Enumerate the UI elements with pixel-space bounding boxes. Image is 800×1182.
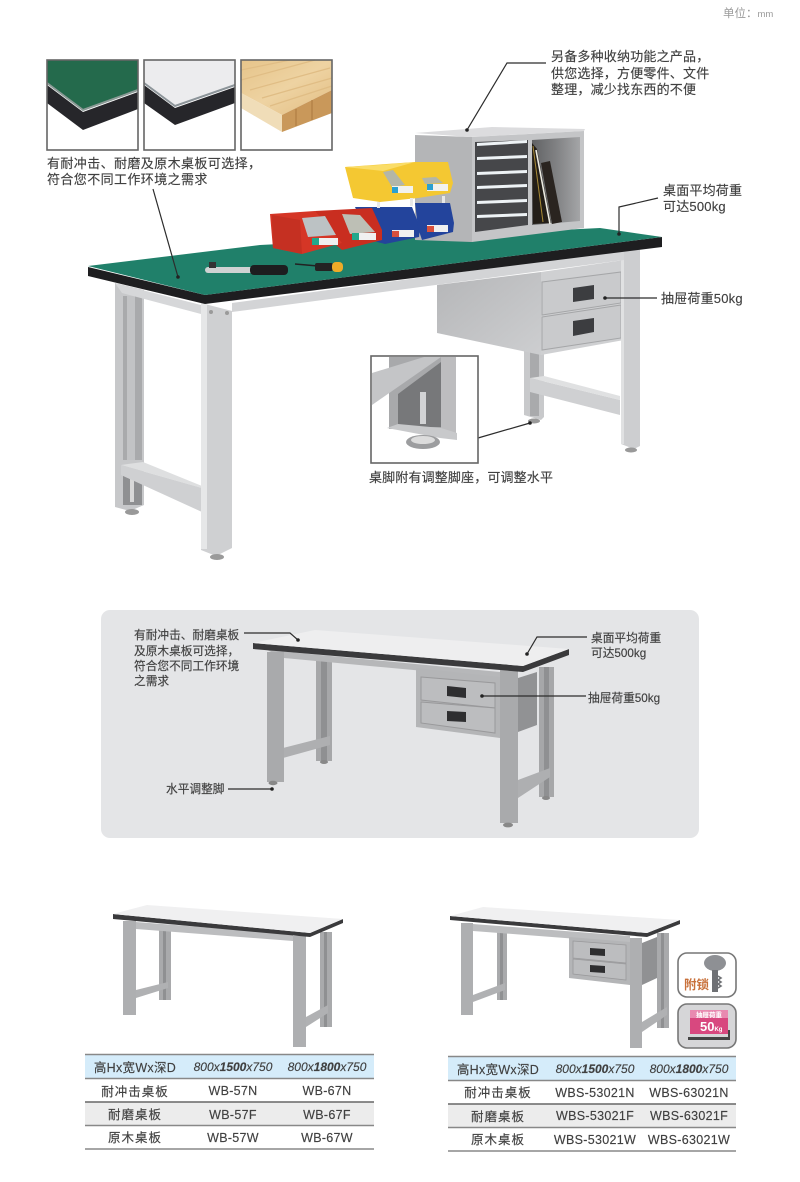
- row: wood: [108, 1131, 353, 1145]
- green tabletop: [88, 228, 662, 304]
- note: top choices: 及原木桌板可选择，: [134, 644, 239, 658]
- front rail: [232, 250, 624, 312]
- left leg with crossbar: [115, 283, 202, 515]
- row: wood: WB-67W: [301, 1131, 353, 1145]
- row: impact: WBS-53021N: [555, 1086, 635, 1100]
- row: wear: 耐磨桌板: [471, 1110, 525, 1124]
- callout: top load: 桌面平均荷重: [663, 183, 742, 198]
- row: impact: WB-57N: [208, 1084, 258, 1098]
- product: bench with drawer: [450, 907, 680, 1048]
- row: wear: WBS-53021F: [556, 1109, 634, 1123]
- panel: bench diagram: [101, 610, 699, 838]
- callout: storage products: 整理，减少找东西的不便: [551, 82, 696, 97]
- yellow bins: [345, 162, 453, 202]
- leader: foot: [478, 421, 532, 438]
- icon: key lock: [678, 953, 736, 997]
- leader: tabletop: [153, 189, 180, 279]
- table: WB models: [85, 1054, 374, 1149]
- header row: [94, 1060, 367, 1075]
- tabletop material swatches: [47, 60, 332, 150]
- bin rack posts: [377, 196, 445, 208]
- header row: 800x1500x750: [194, 1060, 273, 1074]
- unit label: 单位：mm: [723, 6, 773, 20]
- callout: storage products: 供您选择，方便零件、文件: [551, 66, 709, 81]
- row: wood: WB-57W: [207, 1131, 259, 1145]
- header row: [457, 1062, 729, 1077]
- icon: drawer load 50kg: 50Kg: [700, 1019, 723, 1034]
- caption: tabletop choices: 符合您不同工作环境之需求: [47, 172, 208, 187]
- left front leg: [201, 303, 232, 560]
- row: impact: WB-67N: [302, 1084, 352, 1098]
- icon: drawer load 50kg: 抽屉荷重: [696, 1010, 722, 1019]
- row: impact: 耐冲击桌板: [101, 1084, 169, 1099]
- swatch: white wear-resistant top: [144, 60, 235, 150]
- note: top choices: 有耐冲击、耐磨桌板: [134, 629, 239, 642]
- inset: adjustable foot: [371, 356, 478, 463]
- main workbench photo: [88, 127, 662, 560]
- rear legs: [316, 658, 554, 800]
- file cabinet with books: [415, 127, 585, 242]
- side rail: [115, 283, 232, 314]
- back right leg and crossbar: [524, 350, 620, 424]
- row: wear: [471, 1109, 728, 1124]
- header row: 高Hx宽Wx深D: [457, 1062, 539, 1077]
- drawer handles: [477, 140, 527, 218]
- drawer unit: [437, 260, 624, 355]
- blue bins: [355, 203, 454, 244]
- row: wear: WBS-63021F: [650, 1109, 728, 1123]
- row: wear: WB-67F: [303, 1108, 351, 1122]
- header row: 800x1500x750: [556, 1062, 635, 1076]
- front legs: [267, 652, 518, 827]
- row: wood: 原木桌板: [471, 1133, 525, 1147]
- icon: drawer load 50kg: [678, 1004, 736, 1048]
- header row: 高Hx宽Wx深D: [94, 1060, 176, 1075]
- caption: tabletop choices: 有耐冲击、耐磨及原木桌板可选择，: [47, 156, 261, 171]
- leader: drawer: [480, 694, 586, 698]
- row: wear: WB-57F: [209, 1108, 257, 1122]
- note: foot: 水平调整脚: [166, 782, 224, 796]
- leader: top choices: [244, 633, 300, 642]
- product: bench without drawer: [113, 905, 343, 1047]
- row: impact: 耐冲击桌板: [464, 1085, 532, 1100]
- row: impact: WBS-63021N: [649, 1086, 729, 1100]
- header row: 800x1800x750: [288, 1060, 367, 1074]
- diagram rail: [267, 650, 500, 678]
- note: drawer: 抽屉荷重50kg: [588, 691, 660, 705]
- tool: ratchet wrench: [205, 262, 288, 275]
- row: wood: WBS-53021W: [554, 1133, 636, 1147]
- header row: 800x1800x750: [650, 1062, 729, 1076]
- right front leg: [621, 248, 640, 452]
- row: wear: [108, 1108, 351, 1122]
- diagram tabletop: [253, 630, 569, 672]
- row: wood: WBS-63021W: [648, 1133, 730, 1147]
- leader: cabinet: [465, 63, 546, 132]
- diagram bench: [253, 630, 569, 827]
- red bins: [270, 208, 382, 254]
- swatch: solid wood top: [241, 60, 332, 150]
- callout: storage products: 另备多种收纳功能之产品，: [551, 49, 709, 64]
- leader: foot: [228, 787, 274, 791]
- note: load: 可达500kg: [591, 646, 646, 660]
- tool: screwdriver: [295, 262, 343, 272]
- row: impact: [101, 1084, 352, 1099]
- inset caption: 桌脚附有调整脚座，可调整水平: [369, 470, 553, 485]
- leader: load: [525, 637, 587, 656]
- note: top choices: 符合您不同工作环境: [134, 659, 240, 673]
- leader: drawer load: [603, 296, 657, 300]
- row: wear: 耐磨桌板: [108, 1108, 162, 1122]
- note: top choices: 之需求: [134, 674, 169, 688]
- row: wood: 原木桌板: [108, 1131, 162, 1145]
- table: WBS models: [448, 1056, 736, 1151]
- swatch: green impact-resistant top: [47, 60, 138, 150]
- crossbars: [283, 736, 330, 758]
- icon: key lock: 附锁: [684, 977, 710, 992]
- callout: drawer load: 抽屉荷重50kg: [661, 291, 743, 306]
- row: impact: [464, 1085, 729, 1100]
- note: load: 桌面平均荷重: [591, 632, 661, 645]
- row: wood: [471, 1133, 730, 1147]
- leader: top load: [617, 198, 658, 236]
- diagram drawer: [416, 668, 500, 738]
- callout: top load: 可达500kg: [663, 199, 726, 214]
